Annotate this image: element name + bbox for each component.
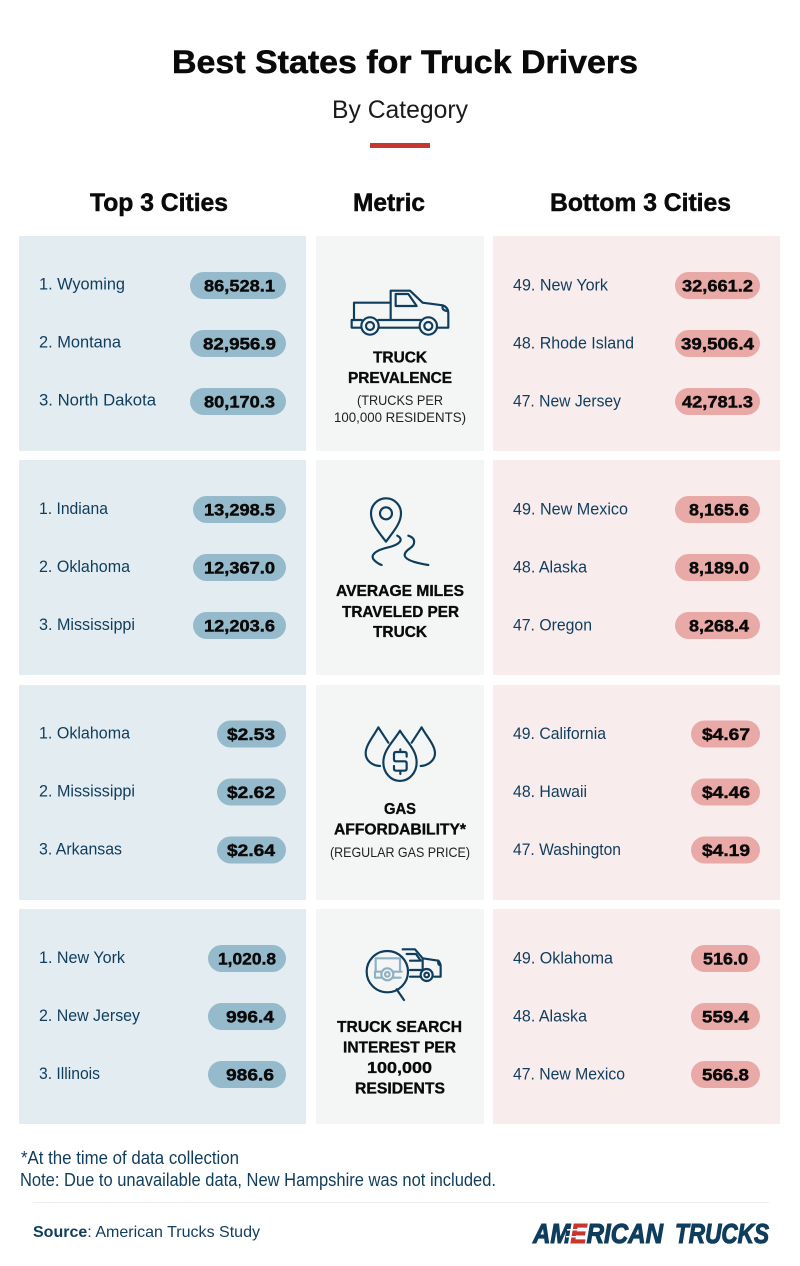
panel: gas affordability metric: GAS [384, 801, 416, 818]
panel: truck prevalence bottom 3: 47. New Jersey [513, 392, 621, 410]
panel: truck search bottom 3: 559.4 [702, 1008, 750, 1026]
panel: truck search top 3: 3. Illinois [39, 1064, 100, 1083]
panel: truck search metric: 100,000 [367, 1060, 432, 1077]
panel: gas affordability bottom 3: 49. California [513, 724, 607, 743]
panel: average miles bottom 3 [493, 460, 780, 675]
icon: fuel drops with dollar sign [366, 727, 435, 781]
panel: gas affordability bottom 3: $4.19 [702, 841, 750, 860]
panel: gas affordability bottom 3 [493, 685, 780, 900]
panel: gas affordability top 3 [19, 685, 306, 900]
panel: truck search top 3: 986.6 [226, 1066, 274, 1084]
panel: truck search bottom 3: 47. New Mexico [513, 1064, 625, 1084]
footnote: Note: Due to unavailable data, New Hampshire was not included. [20, 1170, 496, 1190]
red accent bar [370, 143, 430, 148]
panel: truck search top 3: 996.4 [226, 1008, 275, 1026]
panel: truck search top 3 [19, 909, 306, 1124]
panel: truck search metric: RESIDENTS [355, 1080, 445, 1098]
panel: truck prevalence metric [316, 236, 484, 451]
panel: truck search bottom 3: 566.8 [702, 1066, 749, 1084]
panel: gas affordability top 3: $2.64 [227, 841, 276, 860]
footnote [20, 1148, 496, 1190]
column heading: metric: Metric [353, 189, 425, 217]
footnote: *At the time of data collection [21, 1148, 239, 1168]
panel: average miles top 3: 13,298.5 [204, 500, 275, 520]
panel: truck search metric [316, 909, 484, 1124]
panel: gas affordability bottom 3: $4.67 [702, 725, 750, 744]
panel: average miles bottom 3: 48. Alaska [513, 558, 588, 576]
panel: gas affordability top 3: 3. Arkansas [39, 840, 122, 858]
subtitle: By Category [332, 96, 468, 124]
panel: truck search top 3: 1,020.8 [218, 950, 276, 968]
panel: average miles bottom 3: 8,165.6 [689, 500, 749, 520]
icon: map pin and road [371, 498, 428, 565]
logo: American Trucks: AMERICAN [532, 1218, 664, 1249]
panel: truck prevalence bottom 3: 42,781.3 [682, 392, 753, 412]
panel: gas affordability top 3: $2.53 [227, 725, 275, 744]
panel: truck prevalence top 3: 86,528.1 [204, 276, 275, 296]
panel: average miles bottom 3: 47. Oregon [513, 616, 592, 634]
panel: truck prevalence metric: 100,000 RESIDENTS) [334, 409, 466, 425]
panel: average miles top 3 [19, 460, 306, 675]
panel: truck search top 3: 2. New Jersey [39, 1006, 140, 1025]
panel: average miles metric: TRUCK [373, 624, 427, 641]
panel: average miles top 3: 12,367.0 [204, 558, 275, 578]
panel: truck prevalence top 3: 1. Wyoming [39, 274, 125, 294]
panel: average miles metric: AVERAGE MILES [336, 583, 464, 600]
panel: gas affordability metric: (REGULAR GAS PRICE) [330, 844, 470, 860]
panel: gas affordability metric [316, 685, 484, 900]
panel: average miles metric: TRAVELED PER [342, 604, 459, 621]
panel: truck search metric: INTEREST PER [343, 1040, 456, 1056]
panel: truck prevalence top 3: 82,956.9 [203, 334, 276, 354]
panel: truck search top 3: 1. New York [39, 948, 125, 967]
panel: truck prevalence metric: TRUCK [373, 350, 427, 366]
icon: magnifier over truck [367, 949, 441, 1000]
logo: American Trucks [532, 1218, 769, 1249]
panel: gas affordability top 3: 2. Mississippi [39, 782, 135, 800]
panel: gas affordability metric: AFFORDABILITY* [334, 822, 467, 838]
icon: pickup truck [352, 291, 448, 335]
panel: truck prevalence bottom 3: 32,661.2 [682, 276, 753, 296]
panel: truck search bottom 3: 48. Alaska [513, 1006, 588, 1026]
panel: truck search bottom 3: 49. Oklahoma [513, 948, 614, 968]
panel: average miles metric [316, 460, 484, 675]
panel: gas affordability bottom 3: 48. Hawaii [513, 782, 587, 801]
panel: average miles top 3: 2. Oklahoma [39, 557, 131, 576]
panel: average miles top 3: 12,203.6 [204, 616, 275, 636]
column heading: top 3 cities: Top 3 Cities [90, 189, 228, 217]
panel: gas affordability bottom 3: 47. Washington [513, 840, 621, 859]
panel: truck prevalence bottom 3: 39,506.4 [681, 334, 755, 354]
panel: truck prevalence bottom 3: 48. Rhode Island [513, 334, 634, 352]
panel: truck prevalence top 3 [19, 236, 306, 451]
panel: truck search bottom 3: 516.0 [703, 950, 748, 968]
panel: truck prevalence top 3: 3. North Dakota [39, 390, 157, 410]
title: Best States for Truck Drivers [172, 44, 638, 80]
source: Source: American Trucks Study [33, 1224, 260, 1241]
logo: American Trucks: TRUCKS [675, 1218, 769, 1249]
panel: truck search metric: TRUCK SEARCH [337, 1019, 462, 1036]
panel: gas affordability top 3: $2.62 [227, 783, 275, 802]
panel: truck prevalence metric: PREVALENCE [348, 370, 452, 387]
panel: truck prevalence bottom 3 [493, 236, 780, 451]
panel: truck prevalence top 3: 2. Montana [39, 332, 122, 352]
panel: average miles top 3: 1. Indiana [39, 499, 108, 518]
column heading: bottom 3 cities: Bottom 3 Cities [550, 189, 731, 217]
panel: average miles bottom 3: 49. New Mexico [513, 500, 628, 518]
panel: average miles bottom 3: 8,268.4 [689, 616, 750, 636]
panel: gas affordability bottom 3: $4.46 [702, 783, 750, 802]
panel: truck search bottom 3 [493, 909, 780, 1124]
panel: average miles bottom 3: 8,189.0 [689, 558, 749, 578]
panel: average miles top 3: 3. Mississippi [39, 615, 135, 634]
panel: truck prevalence top 3: 80,170.3 [204, 392, 275, 412]
panel: truck prevalence bottom 3: 49. New York [513, 276, 608, 294]
panel: truck prevalence metric: (TRUCKS PER [357, 392, 443, 408]
panel: gas affordability top 3: 1. Oklahoma [39, 724, 131, 742]
